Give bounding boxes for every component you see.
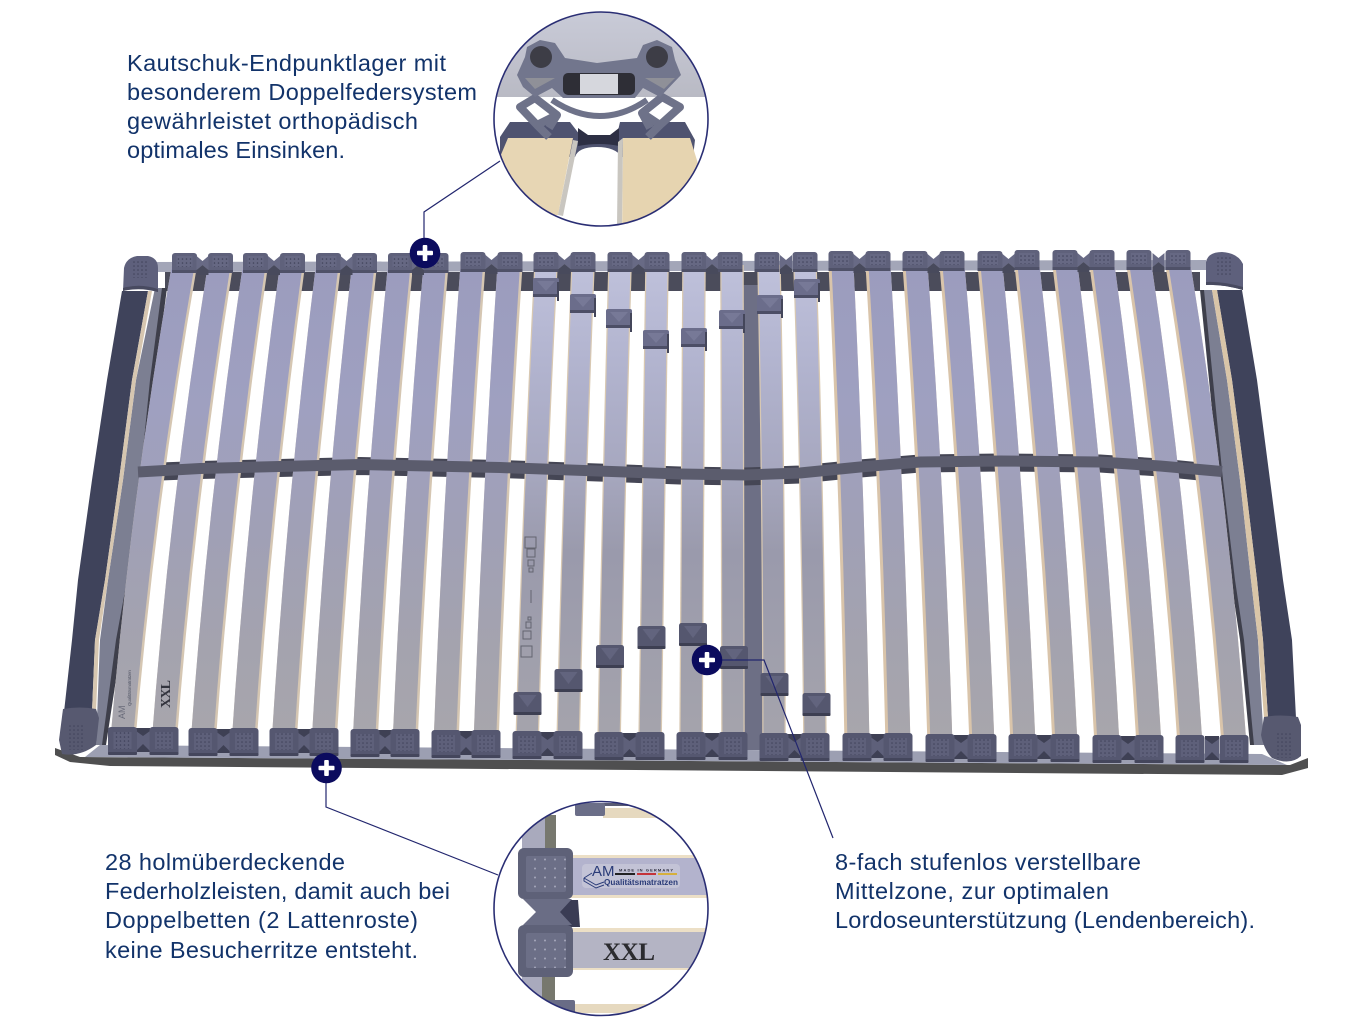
wooden slat ends — [501, 138, 698, 224]
text block: middle zone — [835, 849, 1255, 933]
leader line: end bearing — [424, 161, 500, 240]
leader line: middle zone — [720, 660, 833, 838]
logo: AM — [592, 863, 614, 880]
slats: right group — [841, 265, 1236, 745]
corner cap: top left — [123, 256, 158, 292]
slat print: AM logo — [117, 670, 132, 719]
slats: centre group — [527, 265, 815, 745]
text block: slats: Doppelbetten (2 Lattenroste) — [105, 907, 418, 933]
slat print: AM logo: Qualitätsmatratzen — [127, 670, 132, 706]
bearing bolts — [530, 46, 668, 68]
slat with logo — [570, 855, 715, 898]
plate background — [497, 12, 705, 97]
plus marker: middle zone — [692, 645, 722, 675]
bearing lattice — [520, 97, 680, 137]
lower cap — [518, 925, 573, 977]
lower firmness adjusters — [514, 623, 830, 716]
dark bridge — [578, 128, 619, 146]
slatted bed frame — [55, 250, 1308, 775]
text block: end bearing: besonderem Doppelfedersystem — [127, 79, 477, 105]
slat print: XXL: XXL — [159, 680, 174, 708]
upper neighbour slat — [575, 803, 656, 818]
leader line: slat cap — [326, 783, 498, 875]
centre strap — [138, 461, 1222, 475]
side openings — [525, 78, 675, 89]
strap clips behind slats — [160, 462, 1200, 476]
text block: slats — [105, 849, 450, 963]
text block: end bearing: optimales Einsinken. — [127, 137, 345, 163]
connector — [523, 899, 580, 927]
corner cap: bottom right — [1261, 716, 1301, 762]
centre support bar — [743, 285, 763, 750]
right side beam — [1200, 290, 1296, 745]
corner cap: top right — [1206, 252, 1243, 290]
bearing top plate — [517, 40, 681, 98]
logo: Qualitätsmatratzen — [604, 878, 678, 887]
circle outline — [494, 802, 708, 1016]
corner cap: bottom left — [59, 708, 99, 755]
slat with XXL — [570, 928, 715, 970]
lower neighbour slat — [548, 1000, 648, 1013]
slat holder band — [500, 122, 695, 157]
top slat caps — [172, 250, 1190, 275]
upper cap — [518, 848, 573, 899]
text block: slats: Federholzleisten, damit auch bei — [105, 878, 450, 904]
text block: slats: 28 holmüberdeckende — [105, 849, 345, 875]
upper firmness adjusters — [533, 278, 820, 353]
text block: end bearing — [127, 50, 477, 163]
bottom rail — [55, 745, 1308, 775]
slat with XXL: XXL — [603, 939, 655, 966]
text block: end bearing: Kautschuk-Endpunktlager mit — [127, 50, 446, 76]
text block: middle zone: Lordoseunterstützung (Lendenbereich). — [835, 907, 1255, 933]
text block: middle zone: 8-fach stufenlos verstellbare — [835, 849, 1141, 875]
bottom slat caps — [108, 727, 1248, 763]
circle outline — [494, 12, 708, 226]
slats: left group — [121, 265, 510, 745]
logo: MADE IN GERMANY — [619, 868, 673, 872]
inset circle: slat cap detail — [490, 800, 715, 1020]
text block: slats: keine Besucherritze entsteht. — [105, 937, 418, 963]
top rail with shadow band — [150, 260, 1206, 291]
inset circle: end bearing detail — [493, 11, 709, 227]
plus marker: end bearing — [410, 238, 440, 268]
left side beam — [64, 288, 167, 745]
plus marker: slat cap — [311, 753, 342, 783]
centre window — [563, 73, 635, 95]
side rail — [522, 815, 556, 1000]
text block: end bearing: gewährleistet orthopädisch — [127, 108, 418, 134]
slat print: size squares — [521, 537, 536, 657]
logo — [582, 863, 680, 888]
slat print: AM logo: AM — [117, 706, 127, 719]
text block: middle zone: Mittelzone, zur optimalen — [835, 878, 1109, 904]
